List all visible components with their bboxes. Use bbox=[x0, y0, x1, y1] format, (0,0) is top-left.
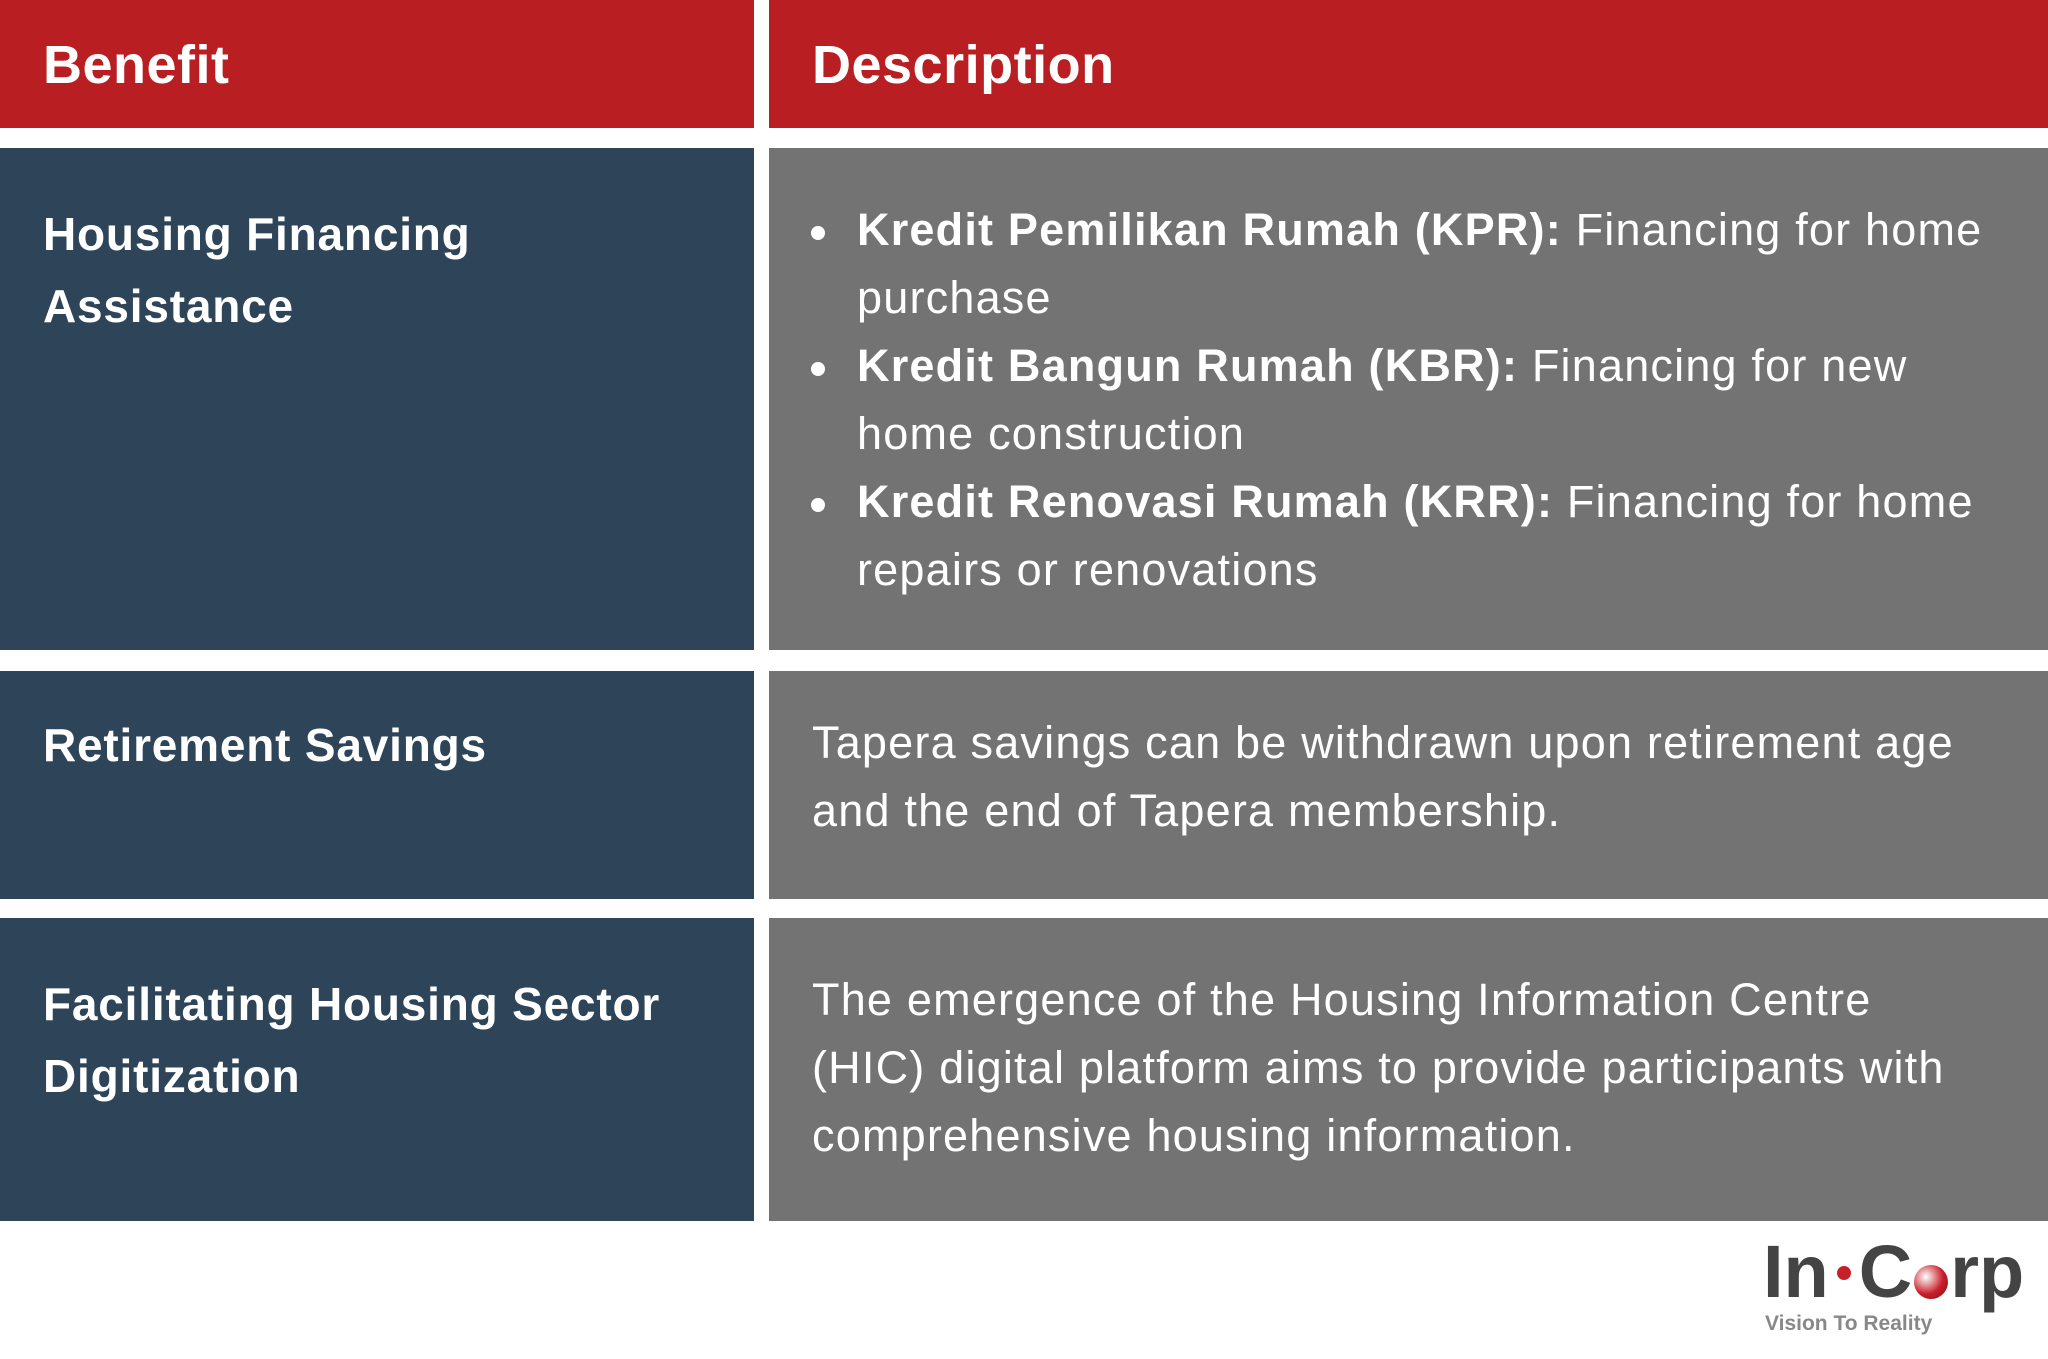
row 2 description: and the end of Tapera membership. bbox=[812, 785, 1561, 836]
logo: Vision To Reality bbox=[1765, 1312, 1932, 1335]
header: benefit: Benefit bbox=[43, 35, 230, 95]
row 3 description bbox=[769, 918, 2048, 1221]
row 1 benefit bbox=[0, 148, 754, 650]
row 3 benefit: Digitization bbox=[43, 1050, 300, 1102]
logo: In C rp bbox=[1763, 1230, 2024, 1313]
row 3 benefit bbox=[0, 918, 754, 1221]
row 3 description: (HIC) digital platform aims to provide participants with bbox=[812, 1042, 1945, 1093]
row 2 description: Tapera savings can be withdrawn upon retirement age bbox=[812, 717, 1954, 768]
row 1 description bbox=[769, 148, 2048, 650]
row 1 description: Kredit Bangun Rumah (KBR): Financing for new home construction bbox=[857, 340, 1907, 459]
row 3 description: comprehensive housing information. bbox=[812, 1110, 1576, 1161]
row 3 benefit: Facilitating Housing Sector bbox=[43, 978, 660, 1030]
row 1 benefit: Assistance bbox=[43, 280, 294, 332]
row 3 description: The emergence of the Housing Information Centre bbox=[812, 974, 1871, 1025]
row 2 benefit bbox=[0, 671, 754, 899]
header: description: Description bbox=[812, 35, 1115, 95]
row 1 description: Kredit Pemilikan Rumah (KPR): Financing for home purchase bbox=[857, 204, 1982, 323]
row 2 description bbox=[769, 671, 2048, 899]
row 1 benefit: Housing Financing bbox=[43, 208, 471, 260]
row 1 description: Kredit Renovasi Rumah (KRR): Financing for home repairs or renovations bbox=[857, 476, 1974, 595]
row 2 benefit: Retirement Savings bbox=[43, 719, 487, 771]
header: description bbox=[769, 0, 2048, 128]
header: benefit bbox=[0, 0, 754, 128]
